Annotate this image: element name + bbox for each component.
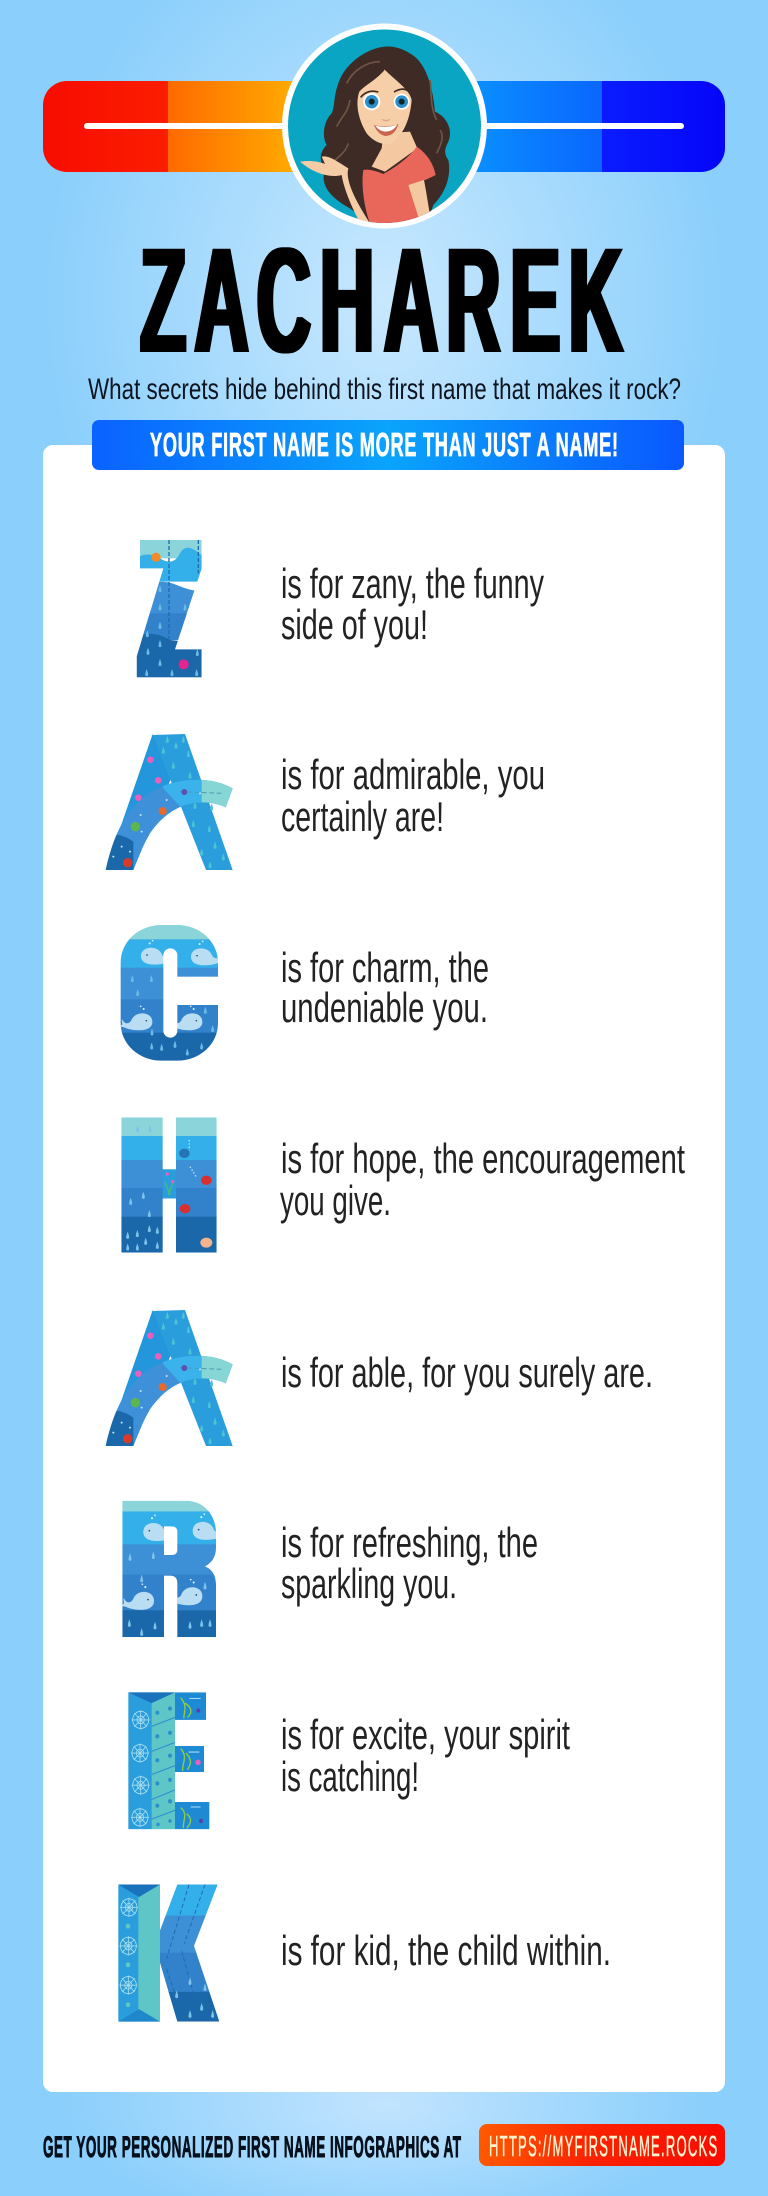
panel: white card (43, 445, 725, 2092)
header bar (43, 81, 725, 172)
text: R: sparkling you. (281, 1560, 457, 1607)
banner: YOUR FIRST NAME IS MORE THAN JUST A NAME! (150, 426, 618, 463)
text: A: is for admirable, you (281, 751, 545, 798)
avatar: woman in circle (282, 24, 487, 228)
text: H: you give. (280, 1177, 391, 1224)
text: E: is catching! (281, 1753, 419, 1800)
text: H (280, 1135, 685, 1224)
footer button: HTTPS://MYFIRSTNAME.ROCKS (489, 2130, 717, 2162)
icon: letter C (118, 923, 224, 1063)
banner (92, 420, 684, 470)
text: E (281, 1711, 570, 1800)
text: C (281, 944, 489, 1031)
text: E: is for excite, your spirit (281, 1711, 570, 1758)
text: Z: is for zany, the funny (281, 560, 544, 607)
icon: letter H (120, 1117, 218, 1253)
text: C: undeniable you. (281, 984, 488, 1031)
title: ZACHAREK (140, 218, 623, 385)
icon: letter K (118, 1883, 222, 2023)
text: R (281, 1519, 538, 1607)
text: R: is for refreshing, the (281, 1519, 538, 1566)
text: A (281, 751, 545, 840)
icon: letter A (second) (106, 1310, 233, 1446)
icon: letter R (122, 1500, 216, 1638)
text: K: is for kid, the child within. (281, 1927, 611, 1974)
text: Z (281, 560, 544, 648)
text: Z: side of you! (281, 601, 428, 648)
text: A: certainly are! (281, 793, 444, 840)
text: C: is for charm, the (281, 944, 489, 991)
footer call to action: GET YOUR PERSONALIZED FIRST NAME INFOGRAPHICS AT (43, 2130, 461, 2163)
icon: letter Z (136, 540, 202, 678)
icon: letter E (128, 1692, 209, 1829)
icon: letter A (106, 734, 233, 870)
